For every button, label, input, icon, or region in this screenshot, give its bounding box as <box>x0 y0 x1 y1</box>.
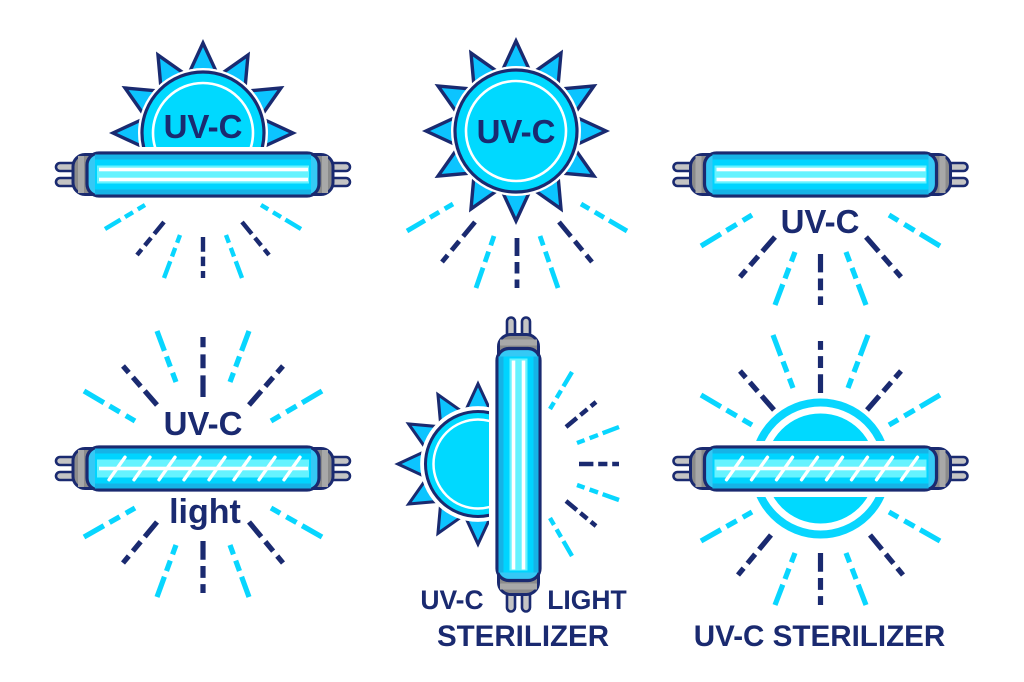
label: UV-C: UV-C <box>164 405 242 442</box>
panel: full sun with rays <box>407 41 627 288</box>
rays right of tube <box>550 372 619 556</box>
icon: ring disc <box>745 402 895 534</box>
icon: sun with UV-C: UV-C <box>477 113 555 150</box>
panel: tube with UV-C light labels <box>56 331 350 597</box>
panel: half sun above tube <box>56 43 350 278</box>
rays below tube <box>84 508 322 597</box>
label: UV-C: UV-C <box>420 585 484 615</box>
rays below <box>701 512 940 605</box>
icon: half sun <box>394 380 489 548</box>
panel: tube over ring disc <box>674 335 968 653</box>
icon: half sun with UV-C <box>109 39 297 147</box>
icon: vertical fluorescent tube <box>497 318 540 612</box>
label: LIGHT: LIGHT <box>547 585 627 615</box>
rays above <box>701 335 940 425</box>
label: UV-C: UV-C <box>781 203 859 240</box>
label: STERILIZER: STERILIZER <box>437 620 609 653</box>
icon: fluorescent tube with filament <box>56 447 350 490</box>
rays below tube <box>105 205 301 278</box>
label: light: light <box>169 493 241 531</box>
icon: fluorescent tube with filament <box>674 447 968 490</box>
panel: tube with UV-C label <box>674 153 968 305</box>
icon: half sun with UV-C: UV-C <box>164 108 242 145</box>
label: UV-C STERILIZER: UV-C STERILIZER <box>694 620 945 653</box>
icon: fluorescent tube <box>674 153 968 196</box>
rays below tube <box>701 215 940 305</box>
icon: sun with UV-C <box>426 41 606 221</box>
rays below sun <box>407 204 627 288</box>
icon: fluorescent tube <box>56 153 350 196</box>
infographic: six UV-C lamp icons <box>54 37 969 646</box>
rays above tube <box>84 331 322 421</box>
panel: vertical tube with half sun <box>398 318 627 653</box>
